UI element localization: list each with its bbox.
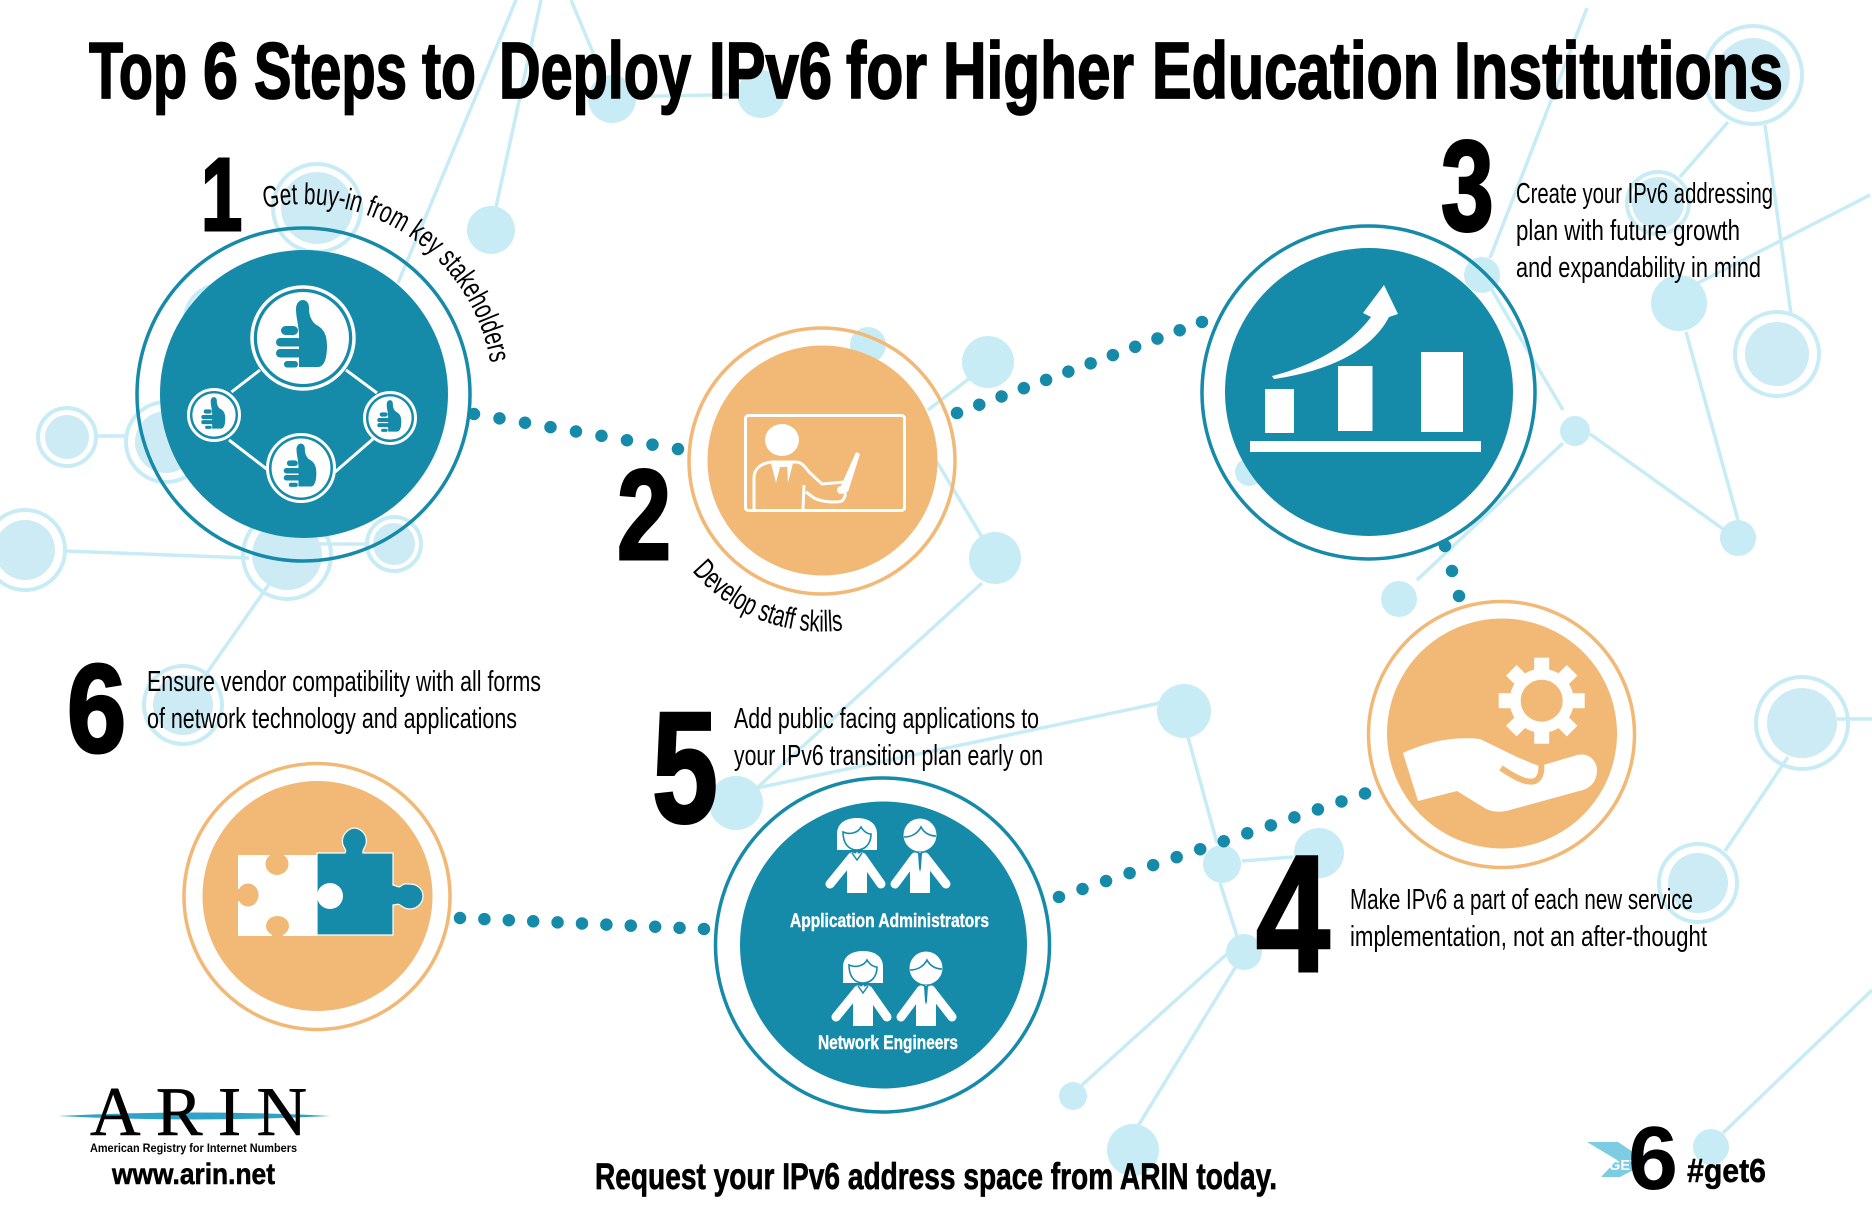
panel: step 4 <box>1256 602 1707 1006</box>
step 2 number: 2 <box>617 444 671 587</box>
step 6 circle <box>184 764 450 1030</box>
icon: network of thumbs up <box>188 287 416 502</box>
icon: growth bar chart with arrow <box>1250 285 1481 452</box>
call to action: Request your IPv6 address space from ARIN today. <box>595 1156 1277 1197</box>
step 1 curved label: Get buy-in from key stakeholders <box>263 182 506 362</box>
step 4 description <box>1350 884 1707 953</box>
title: Top <box>89 26 187 115</box>
panel: step 3 <box>1202 114 1773 559</box>
icon: puzzle pieces <box>237 828 423 937</box>
step 5 description: Add public facing applications to <box>734 703 1039 735</box>
get arrow <box>1587 1142 1648 1177</box>
title: 6 <box>203 26 238 115</box>
logo wordmark: ARIN <box>90 1074 307 1151</box>
title: for <box>846 26 927 115</box>
logo: get6 <box>1587 1109 1766 1209</box>
step 5 description: your IPv6 transition plan early on <box>734 740 1043 772</box>
icon: hand holding gear <box>1403 658 1597 812</box>
step 1 number: 1 <box>201 138 242 253</box>
step 5 description <box>734 703 1043 772</box>
icon: teacher at board <box>746 416 904 510</box>
icon: application administrators <box>830 818 946 893</box>
step 2 circle <box>689 328 955 594</box>
step 4 circle <box>1368 602 1634 868</box>
panel: step 1 <box>135 138 506 563</box>
step 4 description: implementation, not an after-thought <box>1350 921 1707 953</box>
big six: 6 <box>1628 1109 1678 1209</box>
panel: step 2 <box>617 326 957 632</box>
step 6 description <box>147 666 541 735</box>
step 2 curved label: Develop staff skills <box>693 558 842 632</box>
label: application administrators: Application Administrators <box>790 910 989 932</box>
icon: network engineers <box>836 951 952 1026</box>
logo tagline: American Registry for Internet Numbers <box>90 1141 297 1155</box>
step 4 number: 4 <box>1256 821 1330 1006</box>
label: network engineers: Network Engineers <box>818 1032 958 1054</box>
hashtag: #get6 <box>1687 1152 1766 1189</box>
title: Deploy <box>499 26 691 115</box>
step 3 description: and expandability in mind <box>1516 252 1761 284</box>
step 5 number: 5 <box>652 679 718 856</box>
title: Higher <box>943 26 1134 115</box>
step 3 number: 3 <box>1441 114 1494 257</box>
step 6 description: of network technology and applications <box>147 703 517 735</box>
step 6 description: Ensure vendor compatibility with all forms <box>147 666 541 698</box>
panel: step 6 <box>67 639 541 1030</box>
step 6 number: 6 <box>67 639 126 779</box>
step 3 description: plan with future growth <box>1516 215 1740 247</box>
get label: GET <box>1609 1157 1639 1174</box>
title: Education <box>1152 26 1439 115</box>
website: www.arin.net <box>111 1158 275 1191</box>
step 5 circle <box>716 778 1050 1112</box>
logo swoosh <box>58 1112 330 1120</box>
step 3 circle <box>1202 226 1535 559</box>
title: IPv6 <box>709 26 832 115</box>
dotted connectors between steps <box>460 322 1459 929</box>
step 4 description: Make IPv6 a part of each new service <box>1350 884 1693 916</box>
step 1 circle <box>137 228 470 561</box>
title <box>89 26 1783 115</box>
panel: step 5 <box>652 679 1050 1112</box>
step 3 description <box>1516 178 1773 284</box>
title: to <box>422 26 476 115</box>
title: Steps <box>254 26 407 115</box>
logo: ARIN <box>58 1074 330 1191</box>
